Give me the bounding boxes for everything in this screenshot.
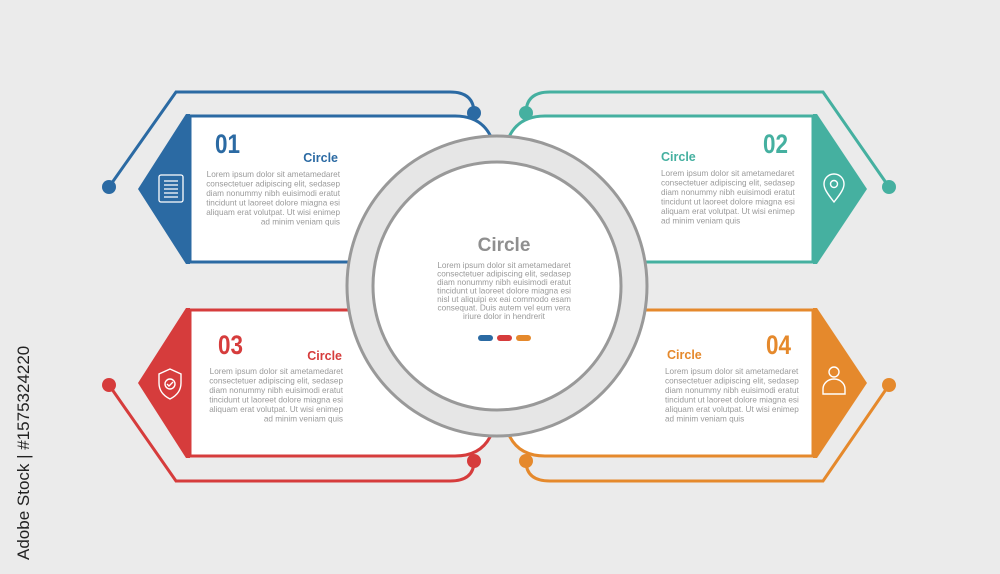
panel 02: 02 <box>763 129 788 159</box>
panel 01: diam nonummy nibh euisimodi eratut <box>206 189 341 198</box>
center circle <box>347 136 647 436</box>
panel 04: ad minim veniam quis <box>665 414 744 424</box>
center text: iriure dolor in hendrerit <box>463 312 546 321</box>
center text: consequat. Duis autem vel eum vera <box>438 304 571 312</box>
panel 01: ad minim veniam quis <box>261 218 340 226</box>
panel 03: ad minim veniam quis <box>264 414 343 424</box>
tab 02 <box>813 114 867 264</box>
center title: Circle <box>478 235 530 256</box>
panel 01: consectetuer adipiscing elit, sedasep <box>206 180 340 188</box>
panel 03: 03 <box>218 330 243 360</box>
panel 01: tincidunt ut laoreet dolore miagna esi <box>206 198 340 208</box>
panel 04: Lorem ipsum dolor sit ametamedaret <box>665 367 799 376</box>
panel 02: tincidunt ut laoreet dolore miagna esi <box>661 198 795 206</box>
center text: Lorem ipsum dolor sit ametamedaret <box>437 261 571 270</box>
panel 03 <box>102 308 490 481</box>
panel 03: tincidunt ut laoreet dolore miagna esi <box>209 396 343 404</box>
panel 02: Circle <box>661 150 696 164</box>
center text: nisl ut aliquipi ex eai commodo esam <box>437 295 571 304</box>
panel 02: ad minim veniam quis <box>661 216 740 226</box>
panel 01: 01 <box>215 129 240 159</box>
panel 04: aliquam erat volutpat. Ut wisi enimep <box>665 405 799 414</box>
panel 01: Lorem ipsum dolor sit ametamedaret <box>207 170 341 179</box>
tab 03 <box>138 308 190 458</box>
center text: diam nonummy nibh euisimodi eratut <box>437 278 572 287</box>
connector line 01 <box>109 92 474 187</box>
center text: tincidunt ut laoreet dolore miagna esi <box>437 286 571 296</box>
panel 03: Lorem ipsum dolor sit ametamedaret <box>210 367 344 376</box>
icon: shield check <box>159 369 181 399</box>
panel 03: consectetuer adipiscing elit, sedasep <box>209 376 343 386</box>
panel 02: Lorem ipsum dolor sit ametamedaret <box>661 169 795 178</box>
panel 04: 04 <box>766 330 791 360</box>
panel 01: aliquam erat volutpat. Ut wisi enimep <box>206 208 340 217</box>
tab 01 <box>138 114 190 264</box>
panel 03: aliquam erat volutpat. Ut wisi enimep <box>209 405 343 414</box>
panel 04: tincidunt ut laoreet dolore miagna esi <box>665 396 799 404</box>
icon: location pin <box>824 174 844 202</box>
panel 04: diam nonummy nibh euisimodi eratut <box>665 386 800 395</box>
panel 03: diam nonummy nibh euisimodi eratut <box>209 386 344 395</box>
panel 02: diam nonummy nibh euisimodi eratut <box>661 188 796 197</box>
color dots <box>478 335 531 341</box>
tab 04 <box>813 308 867 458</box>
panel 04: Circle <box>667 348 702 362</box>
watermark side text: Adobe Stock | #1575324220 <box>14 346 33 560</box>
panel 04 <box>510 308 896 481</box>
panel 02: aliquam erat volutpat. Ut wisi enimep <box>661 207 795 216</box>
panel 02 <box>510 92 896 264</box>
panel 01 <box>102 92 490 264</box>
icon: list document <box>159 175 183 202</box>
center text: consectetuer adipiscing elit, sedasep <box>437 270 571 278</box>
icon: user <box>823 367 845 394</box>
panel 02: consectetuer adipiscing elit, sedasep <box>661 178 795 188</box>
panel 01: Circle <box>303 151 338 165</box>
panel 04: consectetuer adipiscing elit, sedasep <box>665 376 799 386</box>
panel 03: Circle <box>307 349 342 363</box>
